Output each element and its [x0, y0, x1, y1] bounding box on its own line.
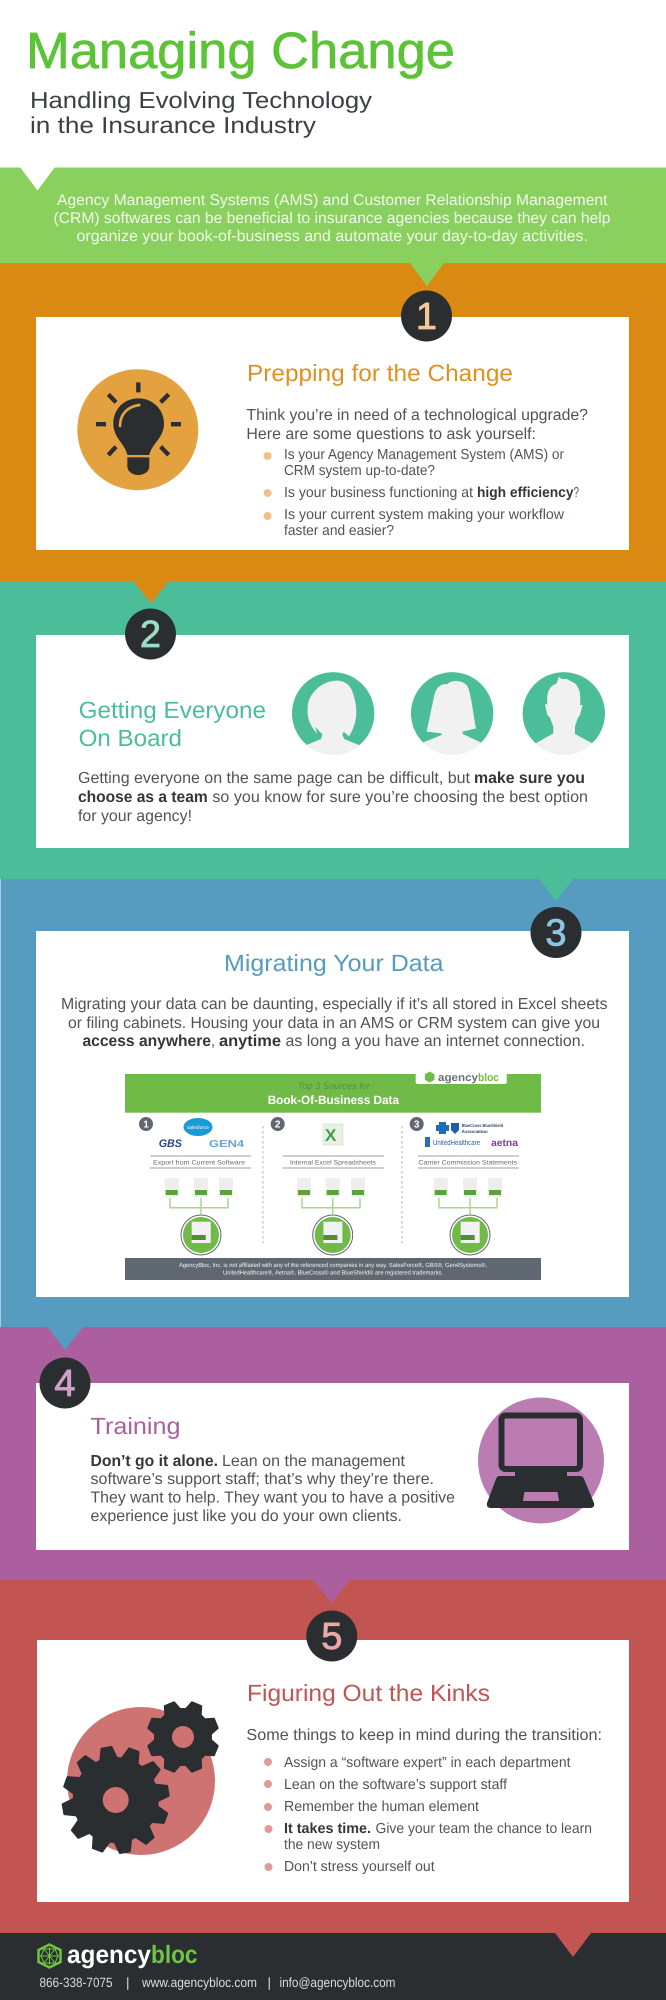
inset logo tab: bloc	[478, 1072, 499, 1084]
inset footer disclaimer: AgencyBloc, Inc. is not affiliated with any of the referenced companies in any way. SalesForce®, GBS®, Gen4Systems®,	[179, 1262, 487, 1269]
number badge 2: 2	[140, 614, 161, 656]
logo	[38, 1941, 198, 1969]
inset header	[125, 1074, 541, 1113]
panel: step 3 migrating your data	[0, 879, 666, 1327]
body text: make sure you	[474, 770, 585, 787]
panel: step 1 prepping for the change	[0, 263, 666, 582]
column 3: carrier commission statements: UnitedHealthcare	[433, 1138, 480, 1147]
panel: step 2 getting everyone on board	[0, 582, 666, 879]
body text	[61, 996, 608, 1050]
bullet list: Assign a “software expert” in each department	[284, 1755, 570, 1771]
column 1: export from current software: 1	[143, 1120, 149, 1130]
intro text	[54, 192, 610, 245]
logo: bloc	[151, 1941, 198, 1969]
white card	[36, 1383, 629, 1550]
inset header: Book-Of-Business Data	[268, 1093, 399, 1107]
bullet list: Is your business functioning at	[284, 485, 473, 501]
bullet list: the new system	[284, 1837, 380, 1853]
body text: choose as a team	[78, 789, 208, 806]
body text: They want to help. They want you to have a positive	[90, 1490, 455, 1506]
bullet list: high efficiency	[477, 485, 574, 501]
arrow: red pointer	[555, 1933, 591, 1957]
footer	[0, 1933, 666, 2000]
number badge 4	[40, 1358, 90, 1408]
body text: software’s support staff; that’s why they’re there.	[90, 1471, 434, 1488]
arrow: blue pointer	[48, 1327, 83, 1350]
body text: as long a you have an internet connection.	[286, 1033, 585, 1050]
column 3: carrier commission statements: Association	[462, 1129, 488, 1134]
panel: intro band	[0, 167, 666, 264]
inset footer disclaimer	[125, 1258, 541, 1280]
icon: gears	[62, 1701, 219, 1855]
inset logo tab	[416, 1072, 507, 1084]
header: title block	[26, 22, 455, 138]
panel: step 4 training	[0, 1327, 666, 1580]
arrow: orange pointer	[134, 582, 168, 604]
column 1: export from current software: GEN4	[209, 1139, 245, 1150]
body text	[246, 407, 588, 443]
column 2: internal excel spreadsheets: Internal Excel Spreadsheets	[290, 1160, 377, 1166]
heading: Migrating Your Data	[224, 950, 444, 976]
body text: for your agency!	[78, 808, 192, 825]
subtitle	[30, 87, 373, 138]
bullet list: Remember the human element	[284, 1799, 479, 1815]
column 2: internal excel spreadsheets: 2	[275, 1120, 281, 1130]
chart: top 3 sources for book-of-business data	[125, 1072, 541, 1280]
heading: Figuring Out the Kinks	[247, 1680, 490, 1706]
number badge 2	[125, 608, 176, 660]
heading: On Board	[79, 725, 182, 751]
small gear	[147, 1701, 219, 1773]
bullet list: Is your Agency Management System (AMS) or	[284, 447, 564, 463]
panel: step 5 figuring out the kinks	[0, 1580, 666, 1933]
number badge 1: 1	[416, 296, 437, 338]
subtitle: in the Insurance Industry	[30, 112, 317, 138]
body text: Some things to keep in mind during the transition:	[246, 1727, 602, 1744]
column 1: export from current software: GBS	[159, 1138, 183, 1150]
column 3: carrier commission statements: BlueCross BlueShield	[462, 1123, 503, 1128]
contact line: |	[126, 1975, 130, 1990]
body text	[90, 1453, 455, 1525]
arrow: white notch	[20, 167, 55, 190]
white card	[37, 1640, 629, 1902]
arrow: teal pointer	[539, 879, 574, 901]
body text: Don’t go it alone.	[90, 1453, 218, 1470]
title: Managing Change	[26, 22, 455, 79]
bullet list: CRM system up-to-date?	[284, 463, 435, 479]
body text: Lean on the management	[222, 1453, 406, 1470]
bullet list: Give your team the chance to learn	[376, 1821, 592, 1837]
number badge 1	[401, 290, 452, 342]
heading: Prepping for the Change	[247, 360, 513, 386]
body text: Here are some questions to ask yourself:	[246, 426, 536, 443]
intro text: organize your book-of-business and automate your day-to-day activities.	[76, 228, 588, 245]
column 1: export from current software	[139, 1117, 251, 1255]
body text	[78, 770, 588, 825]
logo: agency	[67, 1941, 151, 1969]
inset header: Top 3 Sources for	[298, 1081, 371, 1092]
inset footer disclaimer: UnitedHealthcare®, Aetna®, BlueCross® and BlueShield® are registered trademarks.	[223, 1270, 443, 1276]
contact line	[40, 1975, 396, 1990]
number badge 5	[306, 1610, 357, 1662]
body text: access anywhere	[82, 1033, 211, 1050]
large gear	[62, 1746, 169, 1854]
inset logo tab: agency	[438, 1072, 479, 1084]
column 3: carrier commission statements: aetna	[491, 1138, 518, 1149]
contact line: www.agencybloc.com	[141, 1975, 257, 1990]
arrow: purple pointer	[314, 1580, 350, 1604]
bullet list: It takes time.	[284, 1821, 371, 1837]
heading	[79, 697, 266, 751]
icon: light bulb	[77, 369, 198, 490]
column 1: export from current software: Export from Current Software	[153, 1160, 245, 1166]
subtitle: Handling Evolving Technology	[30, 87, 373, 113]
number badge 4: 4	[54, 1363, 76, 1405]
number badge 5: 5	[321, 1616, 342, 1658]
body text: anytime	[219, 1033, 281, 1050]
heading: Getting Everyone	[79, 697, 266, 723]
intro text: Agency Management Systems (AMS) and Customer Relationship Management	[57, 192, 608, 209]
bullet list: Is your current system making your workflow	[284, 507, 565, 523]
white card	[36, 635, 629, 848]
contact line: info@agencybloc.com	[280, 1975, 396, 1990]
column 3: carrier commission statements: 3	[414, 1120, 420, 1130]
body text: so you know for sure you’re choosing the best option	[212, 789, 588, 806]
column 2: internal excel spreadsheets: X	[325, 1126, 337, 1145]
bullet list: faster and easier?	[284, 523, 394, 539]
icon: laptop	[478, 1398, 604, 1524]
heading: Training	[90, 1413, 180, 1439]
column 3: carrier commission statements	[410, 1117, 519, 1255]
white card	[36, 931, 629, 1297]
bullet list	[264, 1755, 592, 1875]
arrow: green pointer	[410, 263, 444, 286]
column 1: export from current software: salesforce	[187, 1125, 209, 1131]
number badge 3	[530, 907, 582, 958]
column 2: internal excel spreadsheets	[271, 1117, 384, 1255]
column 3: carrier commission statements: Carrier Commission Statements	[418, 1160, 518, 1166]
contact line: 866-338-7075	[40, 1975, 112, 1990]
body text: Migrating your data can be daunting, especially if it’s all stored in Excel sheets	[61, 996, 608, 1013]
bullet list: ?	[574, 485, 579, 501]
body text: Getting everyone on the same page can be difficult, but	[78, 770, 471, 787]
number badge 3: 3	[545, 912, 567, 954]
bullet list	[264, 447, 579, 539]
dashed dividers	[263, 1126, 402, 1245]
body text: or filing cabinets. Housing your data in an AMS or CRM system can give you	[68, 1015, 600, 1032]
body text: Think you’re in need of a technological upgrade?	[246, 407, 588, 424]
bullet list: Don’t stress yourself out	[284, 1859, 435, 1875]
icon: three avatars	[292, 672, 605, 758]
intro text: (CRM) softwares can be beneficial to insurance agencies because they can help	[54, 210, 610, 227]
contact line: |	[268, 1975, 271, 1990]
body text: ,	[211, 1033, 215, 1050]
body text: experience just like you do your own clients.	[90, 1508, 402, 1525]
icon: logo hexagon	[38, 1944, 60, 1968]
bullet list: Lean on the software’s support staff	[284, 1777, 508, 1793]
white card	[36, 317, 629, 550]
